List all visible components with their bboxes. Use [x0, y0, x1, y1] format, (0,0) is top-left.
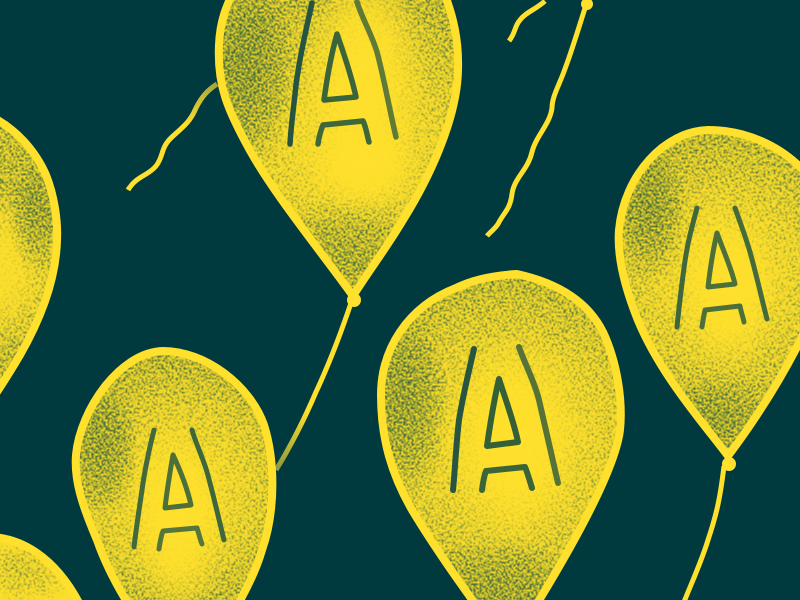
- logo letter A: [290, 2, 396, 144]
- shading: grain: [0, 544, 66, 600]
- string: upper left, behind top balloon: [128, 84, 217, 190]
- string: short top: [509, 1, 545, 41]
- balloon: bottom centre: [377, 270, 625, 600]
- balloon: top centre: [214, 0, 462, 307]
- balloon: bottom left: [72, 347, 276, 600]
- outline: [0, 537, 85, 600]
- shading: grain: [222, 0, 454, 289]
- string: right balloon: [684, 466, 724, 600]
- shading: grain: [0, 126, 54, 380]
- balloon: right: [614, 126, 800, 471]
- balloon: left edge: [0, 116, 62, 394]
- string: top balloon, running behind lower-left balloon: [276, 300, 352, 470]
- logo letter A: [134, 430, 224, 549]
- outline: [381, 274, 621, 600]
- knot: [722, 457, 736, 471]
- string: long top right with knot: [487, 0, 593, 236]
- shading: grain: [80, 355, 268, 600]
- outline: [0, 116, 57, 405]
- logo letter A: [453, 347, 558, 490]
- outline: [619, 130, 800, 456]
- shading: grain: [385, 278, 617, 600]
- shading: grain: [622, 134, 800, 449]
- outline: [76, 351, 272, 600]
- balloon: bottom-left corner: [0, 532, 85, 600]
- outline: [219, 0, 458, 296]
- knot: [347, 293, 361, 307]
- logo letter A: [677, 208, 767, 327]
